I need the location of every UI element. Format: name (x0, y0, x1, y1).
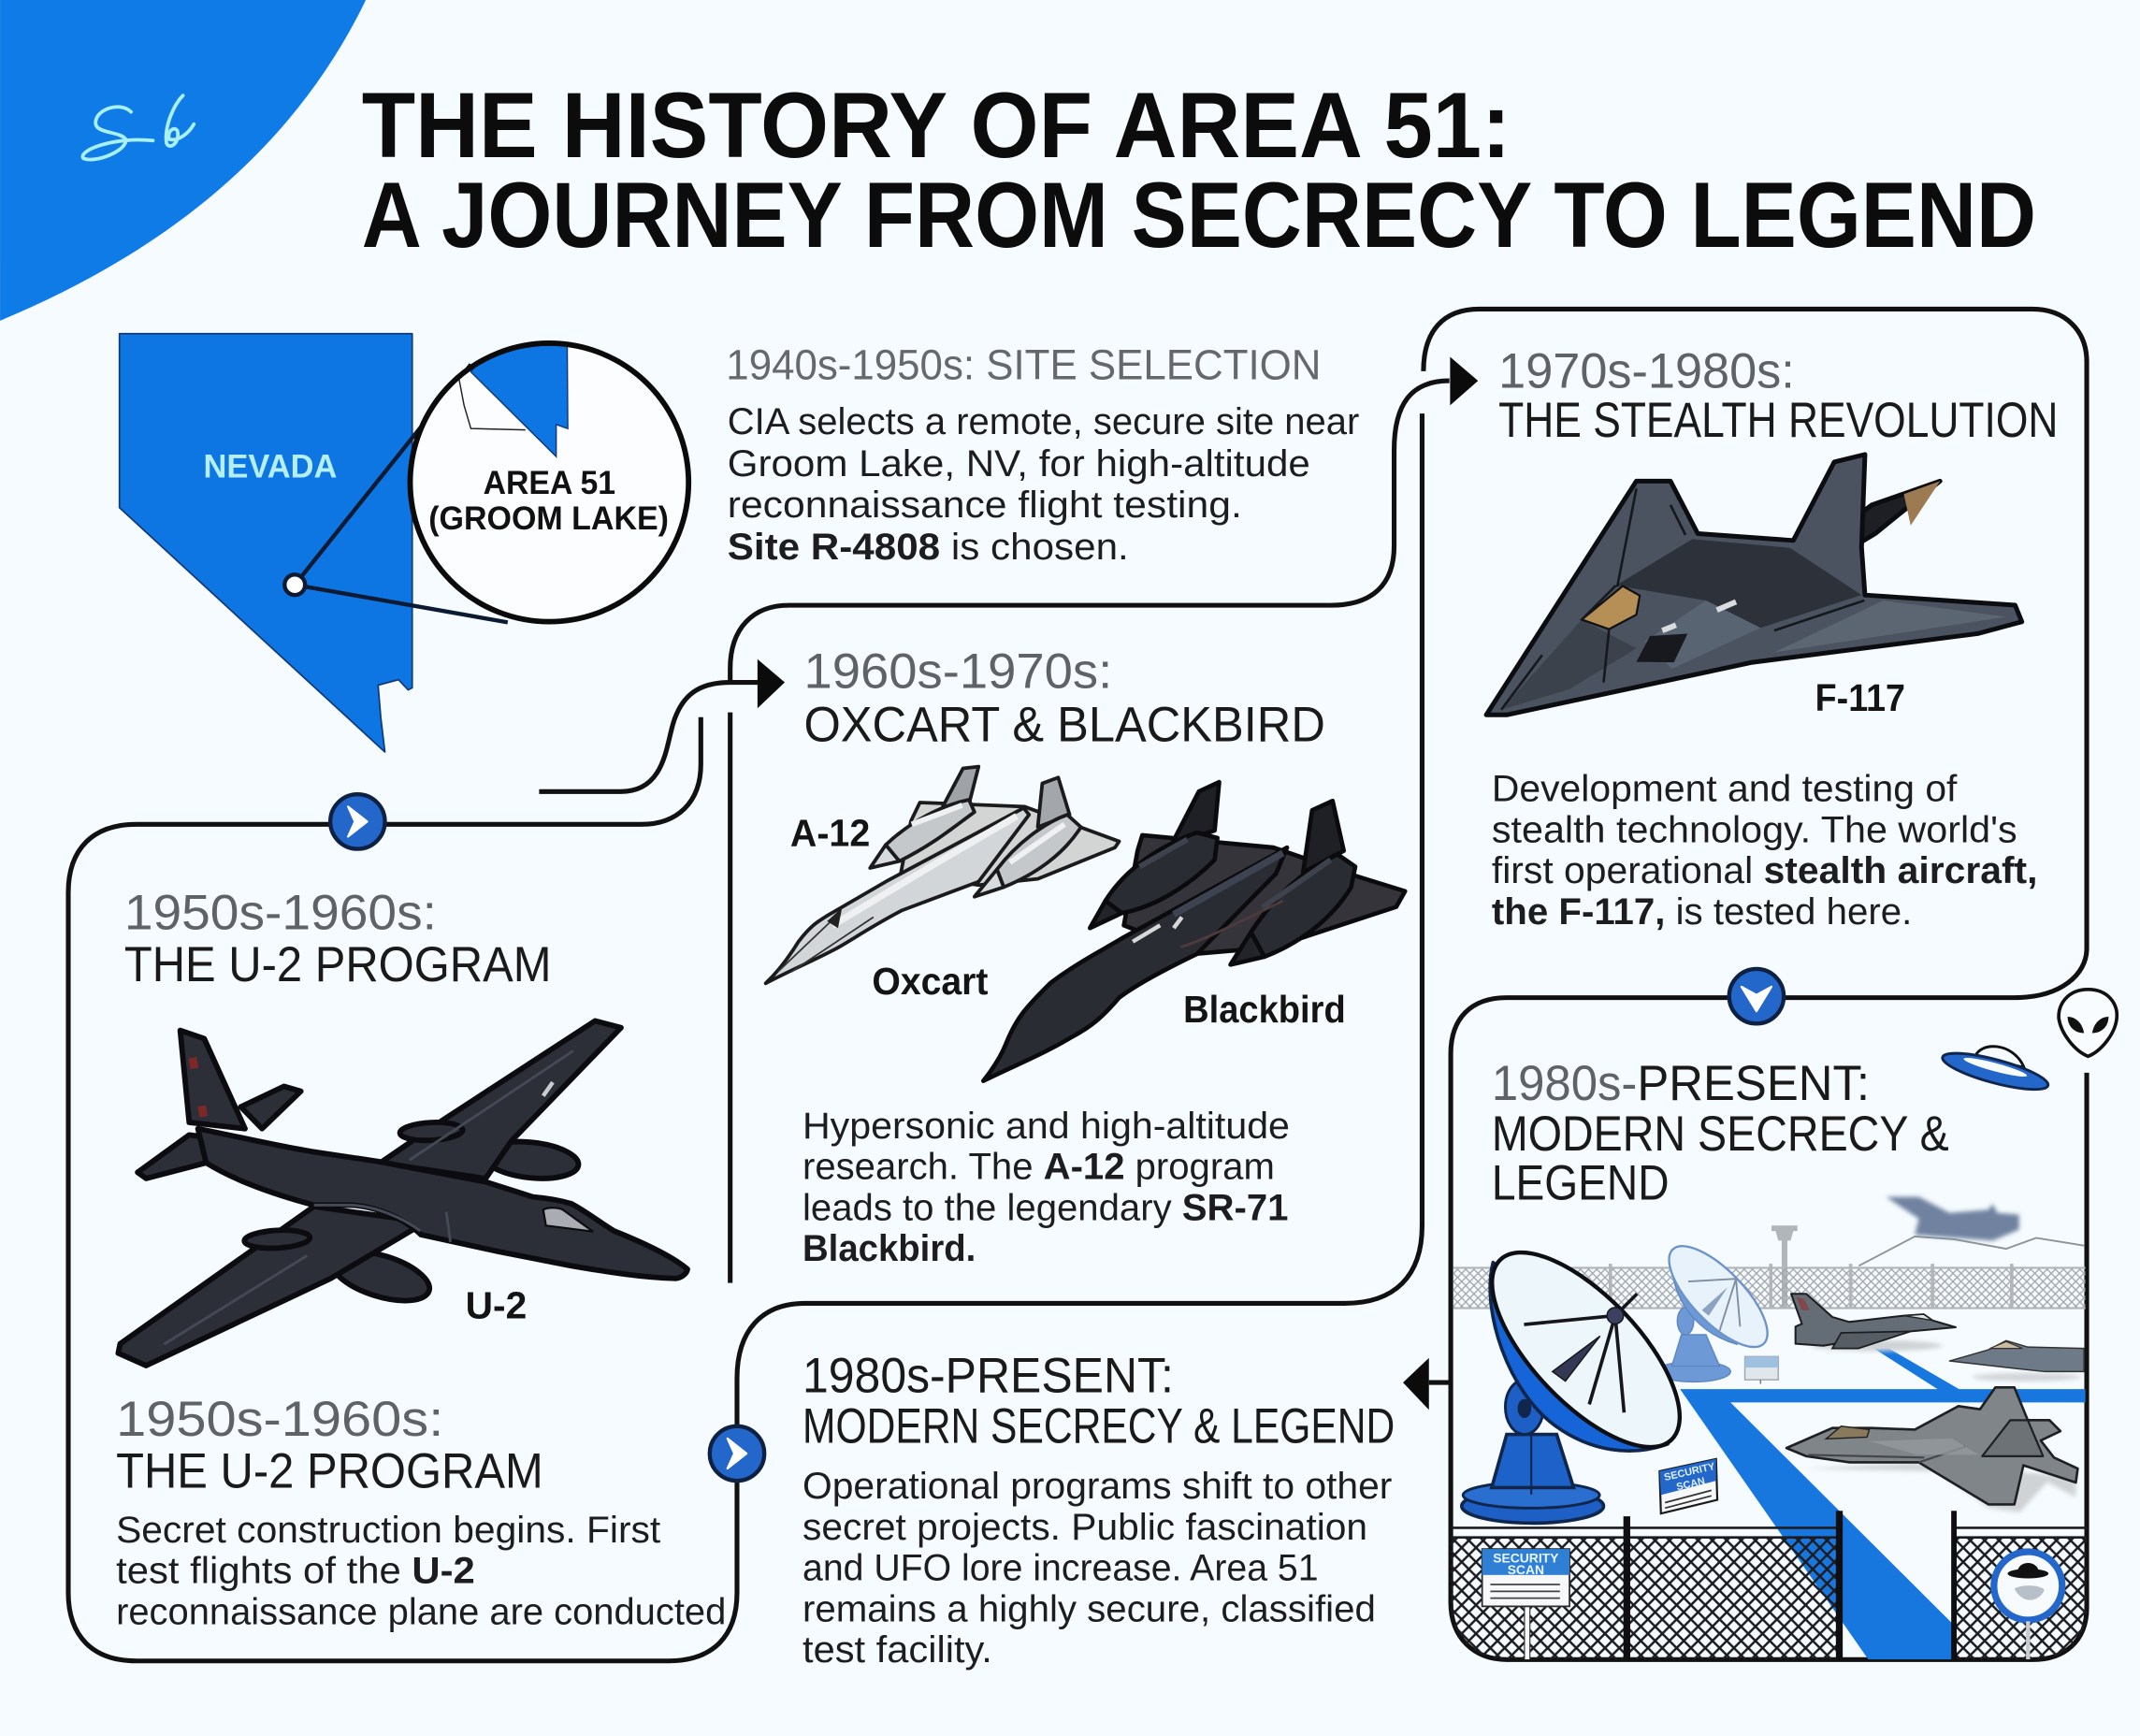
badge: down chevron (1729, 969, 1784, 1023)
body text: research. The A-12 program (802, 1146, 1275, 1188)
heading repeat (116, 1392, 543, 1498)
heading (802, 1348, 1395, 1454)
icon: UFO (1940, 1046, 2051, 1096)
illustration: F-117 aircraft (1486, 455, 2022, 715)
body text (802, 1105, 1290, 1269)
foreground fence (1451, 1511, 2087, 1660)
body text: Blackbird. (802, 1227, 976, 1269)
heading (124, 886, 552, 992)
body text: test facility. (802, 1628, 992, 1671)
small sign (1745, 1356, 1778, 1384)
body text (116, 1509, 726, 1632)
jet: F-22 (1786, 1387, 2077, 1512)
heading: THE U-2 PROGRAM (124, 937, 552, 992)
body text: and UFO lore increase. Area 51 (802, 1547, 1319, 1589)
heading: MODERN SECRECY & (1492, 1107, 1949, 1162)
body text: Secret construction begins. First (116, 1509, 660, 1551)
connector: journey timeline outline (68, 309, 2087, 1661)
map: Nevada with zoom circle: (GROOM LAKE) (428, 500, 669, 537)
body text: leads to the legendary SR-71 (802, 1186, 1288, 1228)
control tower (1771, 1225, 1798, 1309)
label: U-2: U-2 (466, 1284, 527, 1327)
security sign: SECURITY (1493, 1551, 1559, 1566)
heading: 1950s-1960s: (124, 886, 437, 941)
tilted sign (1659, 1459, 1717, 1513)
Nevada state shape (120, 334, 412, 752)
text block: site selection: CIA selects a remote, secure site near (728, 400, 1359, 442)
heading: 1970s-1980s: (1498, 343, 1795, 398)
heading repeat: 1950s-1960s: (116, 1392, 443, 1447)
label: F-117: F-117 (1815, 676, 1905, 719)
badge: right chevron lower (710, 1426, 764, 1481)
illustration: Blackbird aircraft (983, 782, 1405, 1081)
text block: site selection: reconnaissance flight testing. (728, 484, 1242, 526)
location dot (284, 574, 305, 595)
illustration: air base scene (1451, 1197, 2087, 1660)
arrow: into modern panel (1403, 1358, 1429, 1410)
arrow: into Oxcart panel (758, 659, 785, 708)
body text: reconnaissance plane are conducted (116, 1590, 726, 1632)
panel: modern secrecy illustration (1451, 1056, 2087, 1660)
body text (1492, 768, 2038, 933)
text block: site selection: 1940s-1950s: SITE SELECTION (726, 341, 1321, 389)
distant mountains (1858, 1237, 2084, 1266)
heading: MODERN SECRECY & LEGEND (802, 1398, 1395, 1454)
badge: right chevron top (330, 794, 385, 849)
blue corner with signature (0, 0, 366, 321)
security sign (1482, 1549, 1569, 1659)
Nevada label: NEVADA (203, 449, 337, 485)
body text: secret projects. Public fascination (802, 1506, 1367, 1548)
large radar dish (1459, 1250, 1682, 1525)
heading: LEGEND (1492, 1156, 1670, 1211)
illustration: A-12 aircraft (766, 767, 1120, 983)
text block: site selection: Groom Lake, NV, for high-altitude (728, 442, 1310, 485)
security sign: SCAN (1508, 1562, 1544, 1577)
text block: site selection (726, 341, 1359, 568)
heading: 1980s-PRESENT: (1492, 1056, 1870, 1111)
illustration: U-2 aircraft (118, 1020, 687, 1366)
text block: site selection: Site R-4808 is chosen. (728, 526, 1129, 568)
panel: U-2 program (116, 886, 726, 1632)
zoom connector lines (295, 365, 508, 622)
panel: stealth revolution (1486, 343, 2058, 933)
body text: stealth technology. The world's (1492, 808, 2017, 850)
title: THE HISTORY OF AREA 51: (362, 74, 1511, 178)
label: A-12: A-12 (790, 812, 870, 855)
title (362, 74, 2036, 268)
runway markings (1680, 1389, 2086, 1659)
heading: 1960s-1970s: (803, 644, 1112, 699)
jet: second F-16 (1949, 1340, 2084, 1382)
zoom circle (411, 327, 688, 622)
panel: Oxcart and Blackbird (766, 644, 1405, 1269)
body text: the F-117, is tested here. (1492, 890, 1912, 933)
distant fence (1453, 1264, 2086, 1309)
body text: remains a highly secure, classified (802, 1587, 1376, 1629)
zoom label: AREA 51 (484, 465, 615, 501)
heading: OXCART & BLACKBIRD (803, 697, 1325, 752)
heading (803, 644, 1325, 752)
panel: modern secrecy text (802, 1348, 1395, 1671)
heading repeat: THE U-2 PROGRAM (116, 1443, 543, 1498)
map: Nevada with zoom circle (120, 327, 688, 752)
icon: signature (82, 95, 194, 160)
tilted sign: SECURITY (1663, 1461, 1716, 1483)
tilted sign: SCAN (1675, 1476, 1706, 1493)
body text: Hypersonic and high-altitude (802, 1105, 1290, 1147)
blurred jet (1887, 1197, 2019, 1240)
body text: first operational stealth aircraft, (1492, 849, 2038, 891)
heading (1498, 343, 2058, 448)
heading (1492, 1056, 1949, 1211)
label: Blackbird: Blackbird (1183, 988, 1346, 1031)
small radar dish (1665, 1245, 1769, 1382)
body text: Development and testing of (1492, 768, 1958, 810)
body text: test flights of the U-2 (116, 1550, 475, 1592)
heading: 1980s-PRESENT: (802, 1348, 1174, 1403)
icon: alien head (2059, 990, 2117, 1056)
round UFO badge (1994, 1552, 2062, 1659)
body text: Operational programs shift to other (802, 1465, 1392, 1507)
jet: F-16 (1791, 1294, 1956, 1352)
body text (802, 1465, 1392, 1671)
label: Oxcart: Oxcart (872, 960, 989, 1003)
arrow: into stealth panel (1450, 357, 1478, 405)
